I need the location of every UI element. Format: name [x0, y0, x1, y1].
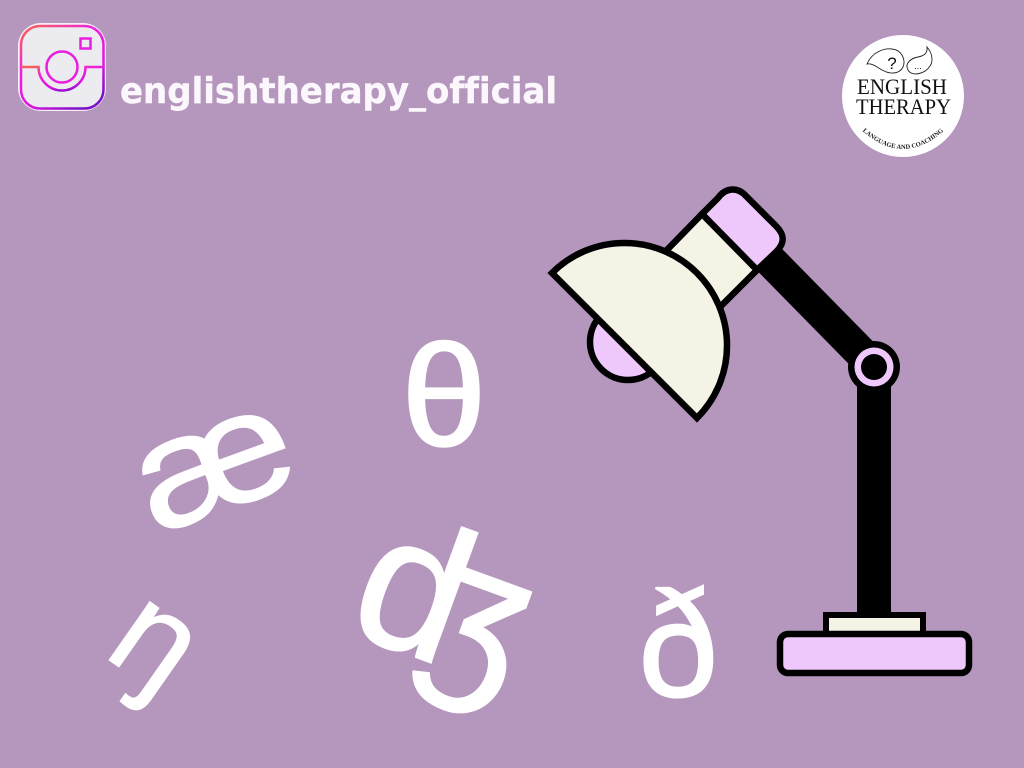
logo: English Therapy [842, 35, 964, 157]
lamp bulb [590, 304, 666, 380]
lamp post [857, 367, 891, 617]
icon: question speech bubble: ? [887, 54, 897, 73]
logo wordmark: ENGLISH [857, 74, 947, 99]
logo tagline: LANGUAGE AND COACHING [862, 128, 943, 149]
handle text: englishtherapy_official [120, 71, 557, 112]
phonetic symbol: theta: θ [402, 316, 486, 476]
phonetic symbol: eth: ð [638, 561, 718, 728]
desk lamp illustration [552, 189, 969, 673]
lamp base [780, 634, 969, 673]
lamp joint [848, 341, 900, 393]
phonetic symbol: eng: ŋ [85, 555, 232, 721]
lamp base collar [826, 615, 923, 635]
lamp neck [663, 214, 757, 309]
lamp shade [552, 243, 727, 418]
lamp cap [702, 189, 783, 270]
phonetic symbol: dezh: ʤ [329, 470, 563, 728]
phonetic symbol: ae: æ [107, 350, 316, 567]
logo: English Therapy: THERAPY [856, 94, 951, 119]
lamp arm [760, 250, 872, 364]
icon: ellipsis speech bubble: ... [914, 61, 922, 71]
icon: instagram camera [18, 23, 106, 111]
